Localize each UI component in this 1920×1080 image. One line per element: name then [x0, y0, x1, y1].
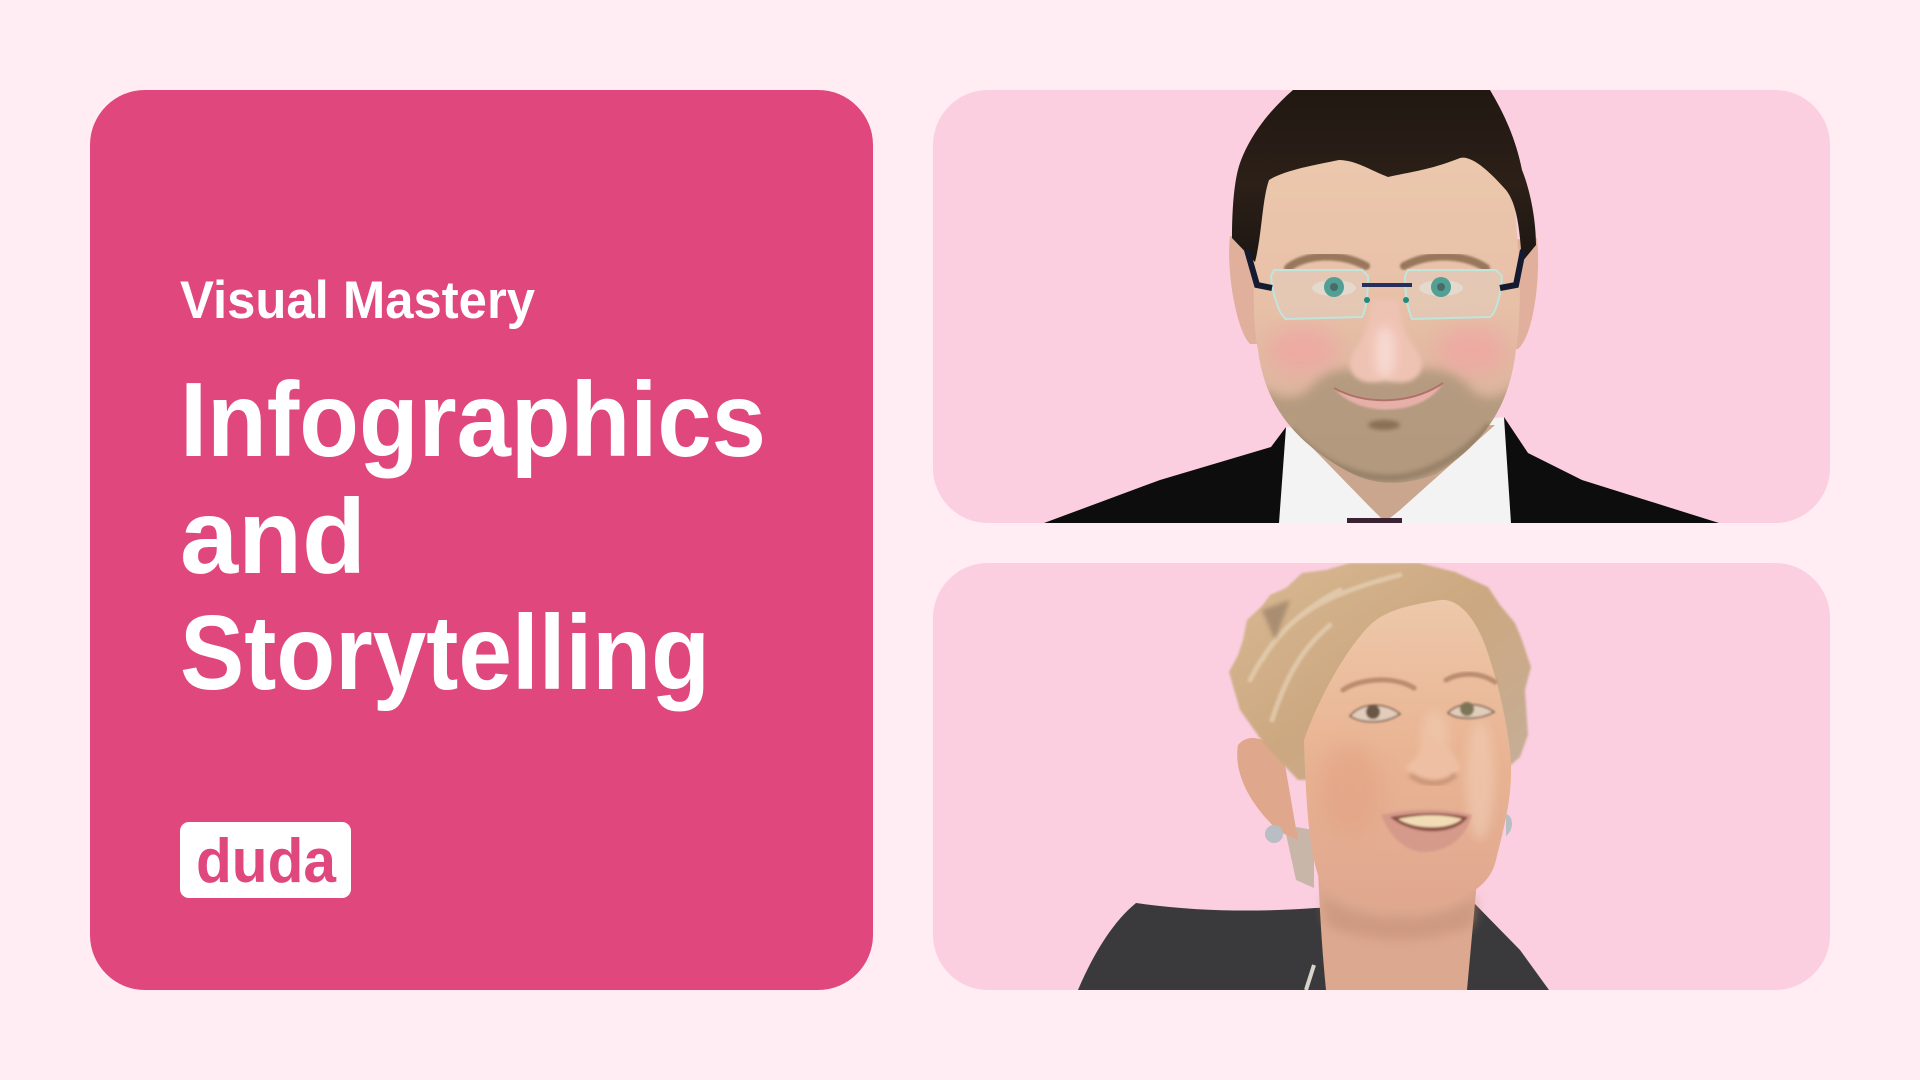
chin shadow on neck — [1322, 895, 1478, 940]
beard — [1267, 364, 1508, 483]
main heading: Infographics — [180, 361, 766, 479]
facial shading — [1320, 710, 1494, 840]
shirt collar — [1279, 417, 1511, 523]
hair — [1232, 90, 1536, 262]
eyebrows — [1288, 256, 1486, 268]
face — [1254, 158, 1520, 460]
eyes — [1350, 702, 1494, 722]
slide canvas — [90, 90, 1830, 990]
eyebrows — [1343, 674, 1495, 690]
neck — [1318, 870, 1478, 990]
earrings — [1265, 814, 1512, 843]
mouth — [1381, 810, 1472, 852]
nose — [1408, 754, 1460, 786]
neck hair — [1284, 825, 1314, 888]
nose — [1350, 300, 1422, 382]
main heading: and — [180, 478, 366, 596]
main heading — [180, 361, 766, 712]
cheeks — [1266, 326, 1508, 374]
logo: duda: duda — [196, 827, 336, 896]
panel: speaker portrait, woman with short blonde hair — [933, 563, 1830, 990]
panel: title card — [90, 90, 873, 990]
jacket — [1044, 417, 1719, 523]
ears — [1229, 236, 1538, 349]
tie — [1347, 518, 1402, 523]
jaw shadow — [1290, 425, 1490, 478]
main heading: Storytelling — [180, 594, 710, 712]
jacket — [1078, 903, 1549, 990]
hair — [1229, 563, 1531, 780]
neck — [1312, 425, 1495, 518]
facial shading — [1267, 325, 1508, 483]
ear — [1237, 738, 1298, 840]
subtitle: Visual Mastery — [180, 271, 535, 330]
necklace — [1306, 965, 1314, 990]
hair strands — [1250, 575, 1400, 720]
face — [1304, 600, 1511, 909]
mouth — [1334, 383, 1443, 430]
darker roots — [1262, 600, 1290, 640]
eyes — [1312, 277, 1463, 297]
glasses — [1247, 250, 1523, 319]
panel: speaker portrait, man with glasses — [933, 90, 1830, 523]
